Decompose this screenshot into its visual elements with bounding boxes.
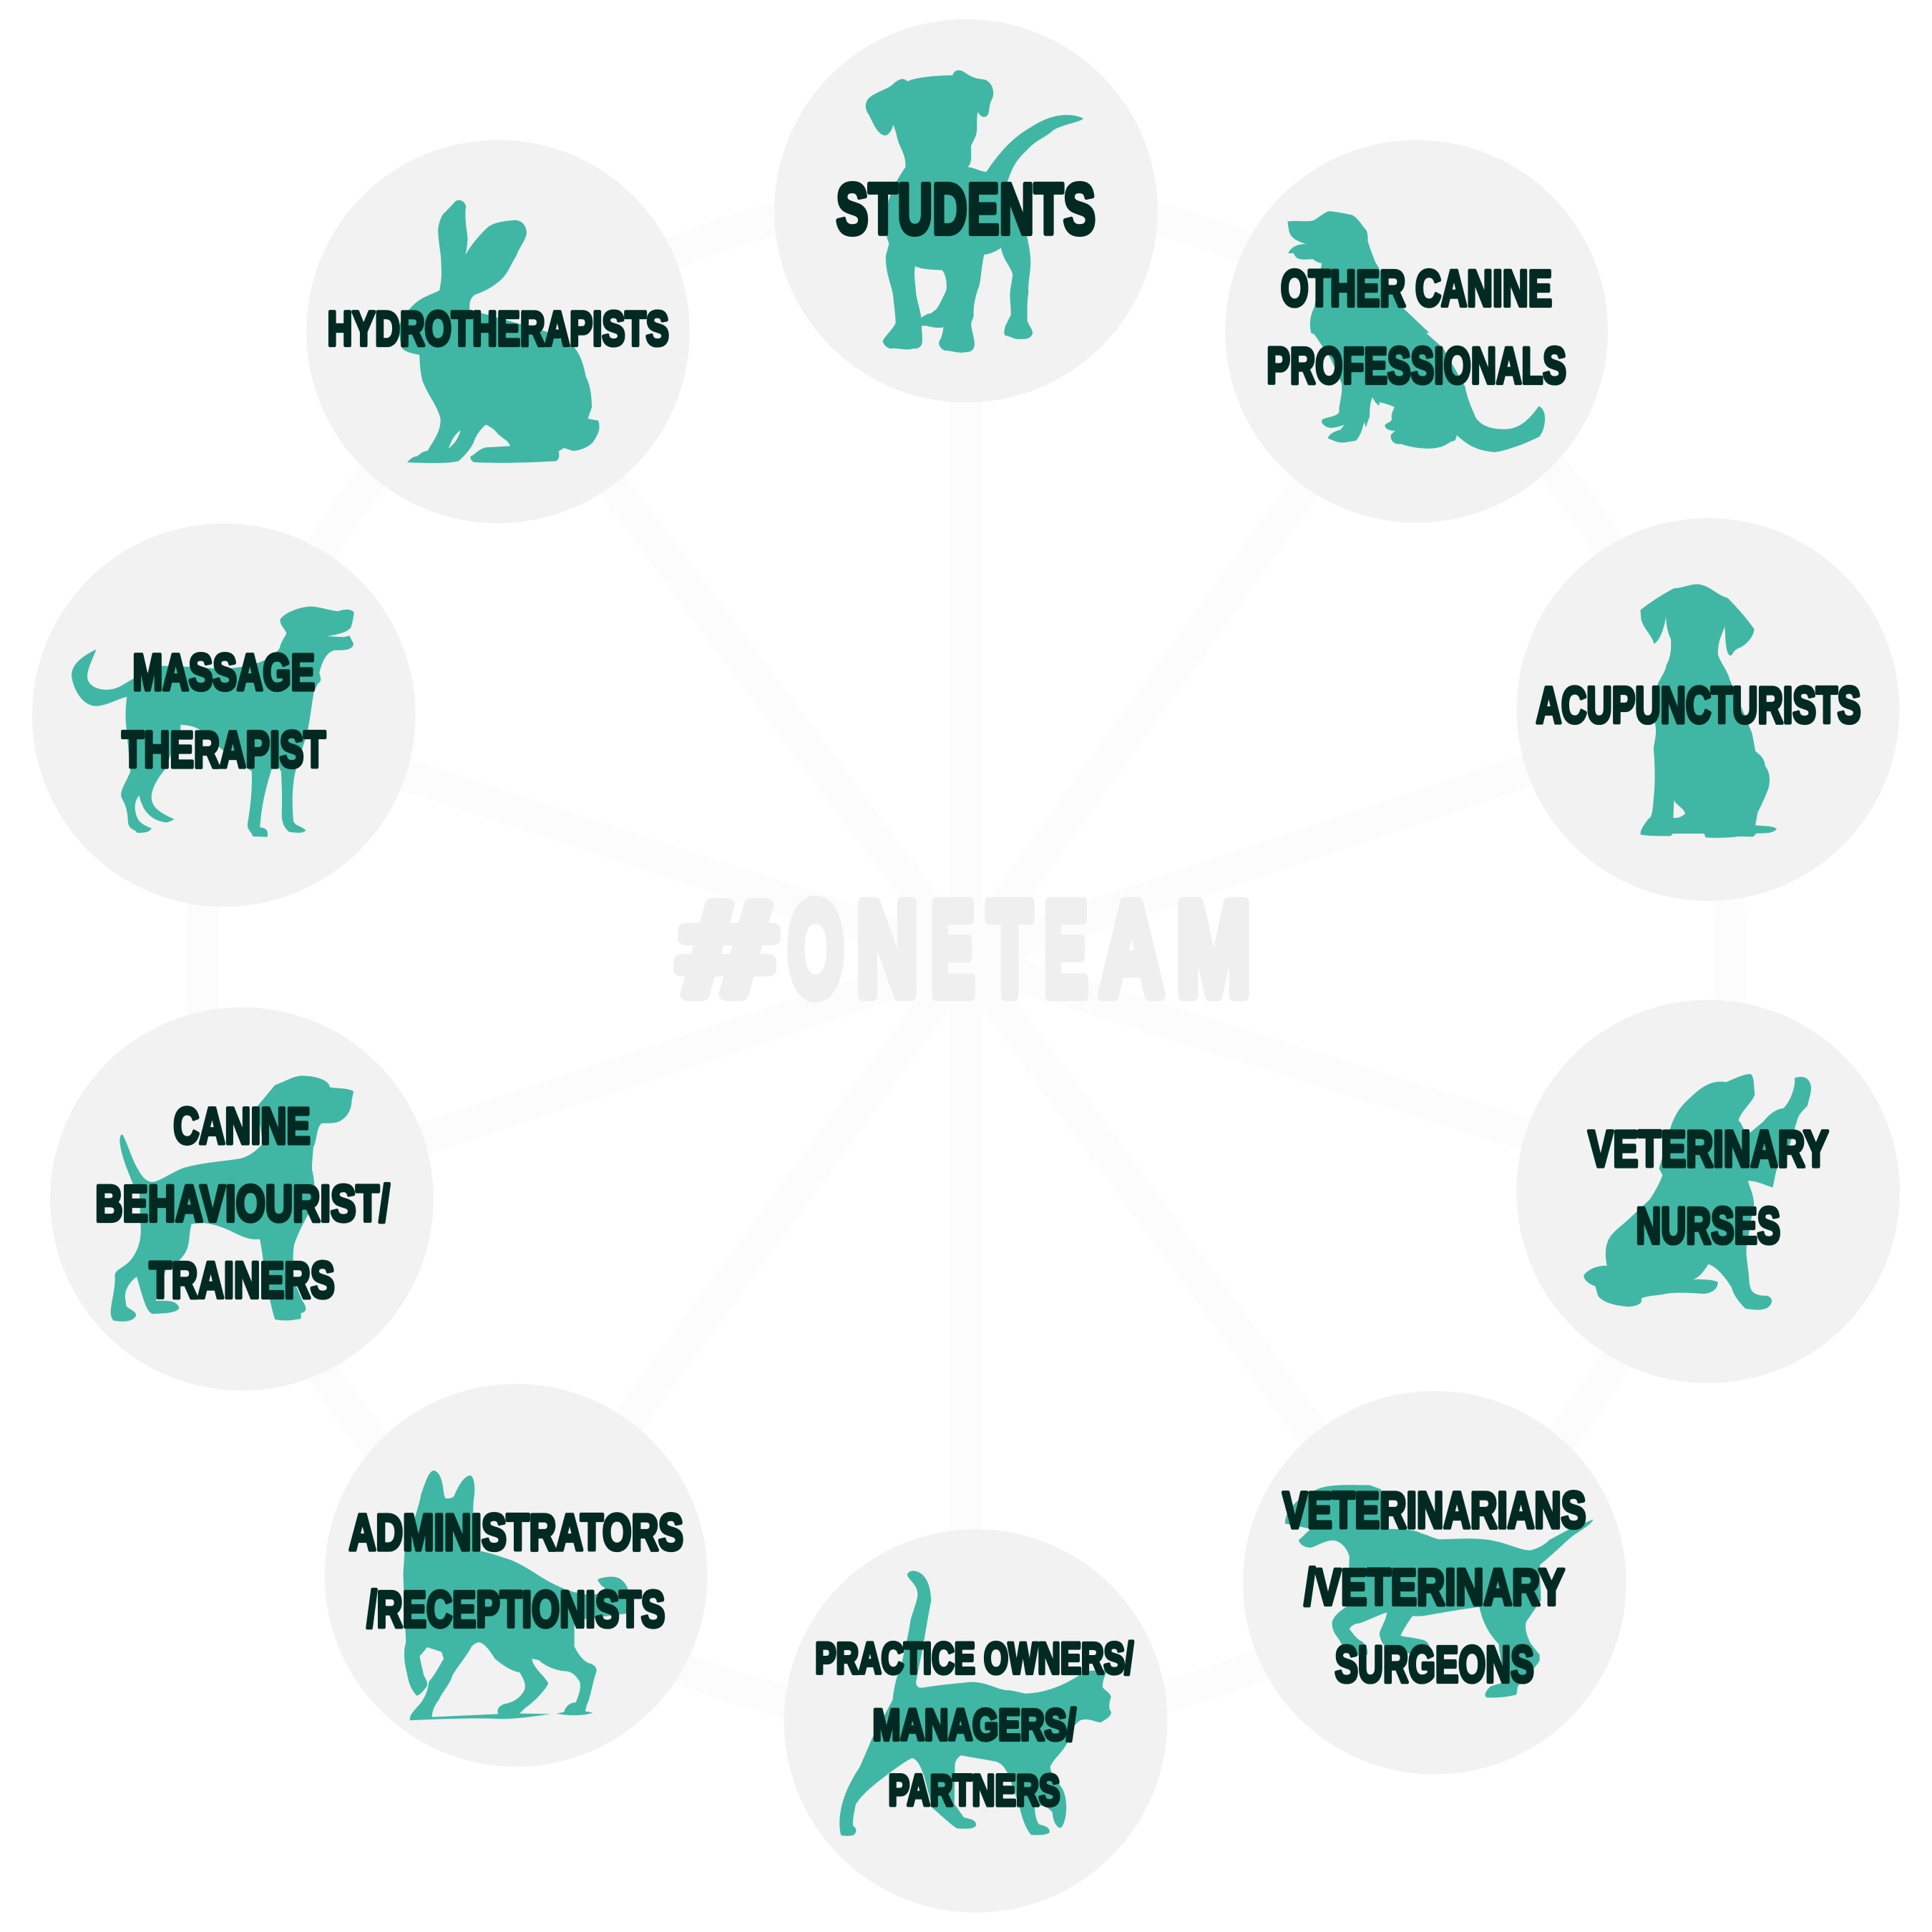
panel: hydrotherapists [306, 140, 690, 523]
panel: veterinary nurses [1516, 1000, 1900, 1383]
title: #ONETEAM: N [857, 876, 918, 1023]
label: veterinary nurses: VETERINARY [1588, 1121, 1828, 1178]
label: veterinarians / veterinary surgeons: /VETERINARY [1304, 1558, 1565, 1616]
panel: massage therapist [32, 524, 416, 907]
label: veterinarians / veterinary surgeons [1282, 1482, 1586, 1693]
icon: dog raising paw silhouette [1584, 1074, 1811, 1310]
label: massage therapist: THERAPIST [122, 721, 326, 779]
label: practice owners / managers / partners [815, 1634, 1133, 1815]
label: other canine professionals: OTHER CANINE [1281, 260, 1552, 317]
icon: shepherd dog silhouette [403, 1470, 629, 1720]
label: canine behaviourist / trainers [95, 1098, 390, 1309]
label: practice owners / managers / partners: MANAGERS/ [873, 1700, 1076, 1749]
label: hydrotherapists: HYDROTHERAPISTS [328, 303, 669, 356]
icon: rabbit silhouette [399, 200, 600, 463]
icon: puppy silhouette [866, 70, 1083, 353]
label: canine behaviourist / trainers: TRAINERS [150, 1252, 335, 1309]
label: veterinary nurses: NURSES [1636, 1197, 1780, 1254]
panel: practice owners / managers / partners [784, 1529, 1167, 1913]
label: veterinary nurses [1588, 1121, 1828, 1254]
label: students: STUDENTS [836, 169, 1096, 249]
title: #ONETEAM: O [788, 876, 844, 1023]
label: practice owners / managers / partners: PRACTICE OWNERS/ [815, 1634, 1133, 1682]
label: administrators / receptionists: ADMINISTRATORS [349, 1504, 683, 1561]
label: practice owners / managers / partners: PARTNERS [888, 1766, 1060, 1815]
label: other canine professionals: PROFESSIONALS [1267, 337, 1566, 394]
title: #ONETEAM [679, 876, 1251, 1023]
label: veterinarians / veterinary surgeons: SURGEONS [1335, 1636, 1534, 1693]
label: veterinarians / veterinary surgeons: VETERINARIANS [1282, 1482, 1586, 1539]
label: massage therapist [122, 644, 326, 779]
label: canine behaviourist / trainers: BEHAVIOURIST/ [95, 1176, 390, 1233]
panel: canine behaviourist / trainers [50, 1008, 434, 1390]
icon: barking dog silhouette [72, 606, 354, 837]
title: #ONETEAM: T [987, 876, 1032, 1023]
panel: acupuncturists [1517, 518, 1899, 901]
label: administrators / receptionists: /RECEPTIONISTS [367, 1581, 665, 1638]
panel: other canine professionals [1225, 140, 1608, 523]
icon: cat silhouette [839, 1571, 1111, 1836]
panel: administrators / receptionists [325, 1384, 708, 1767]
title: #ONETEAM: A [1100, 876, 1163, 1023]
icon: standing hound silhouette [111, 1075, 353, 1322]
title: #ONETEAM: # [679, 876, 775, 1023]
label: canine behaviourist / trainers: CANINE [173, 1098, 311, 1155]
panel: students [774, 19, 1158, 402]
icon: walking dog silhouette [1285, 1485, 1593, 1698]
label: other canine professionals [1267, 260, 1566, 394]
label: massage therapist: MASSAGE [132, 644, 315, 701]
title: #ONETEAM: M [1176, 876, 1251, 1023]
panel: veterinarians / veterinary surgeons [1243, 1391, 1626, 1775]
icon: seated dog silhouette [1287, 211, 1545, 452]
title: #ONETEAM: E [1044, 876, 1088, 1023]
icon: seated puppy silhouette [1640, 584, 1777, 838]
title: #ONETEAM: E [931, 876, 975, 1023]
label: administrators / receptionists [349, 1504, 683, 1638]
